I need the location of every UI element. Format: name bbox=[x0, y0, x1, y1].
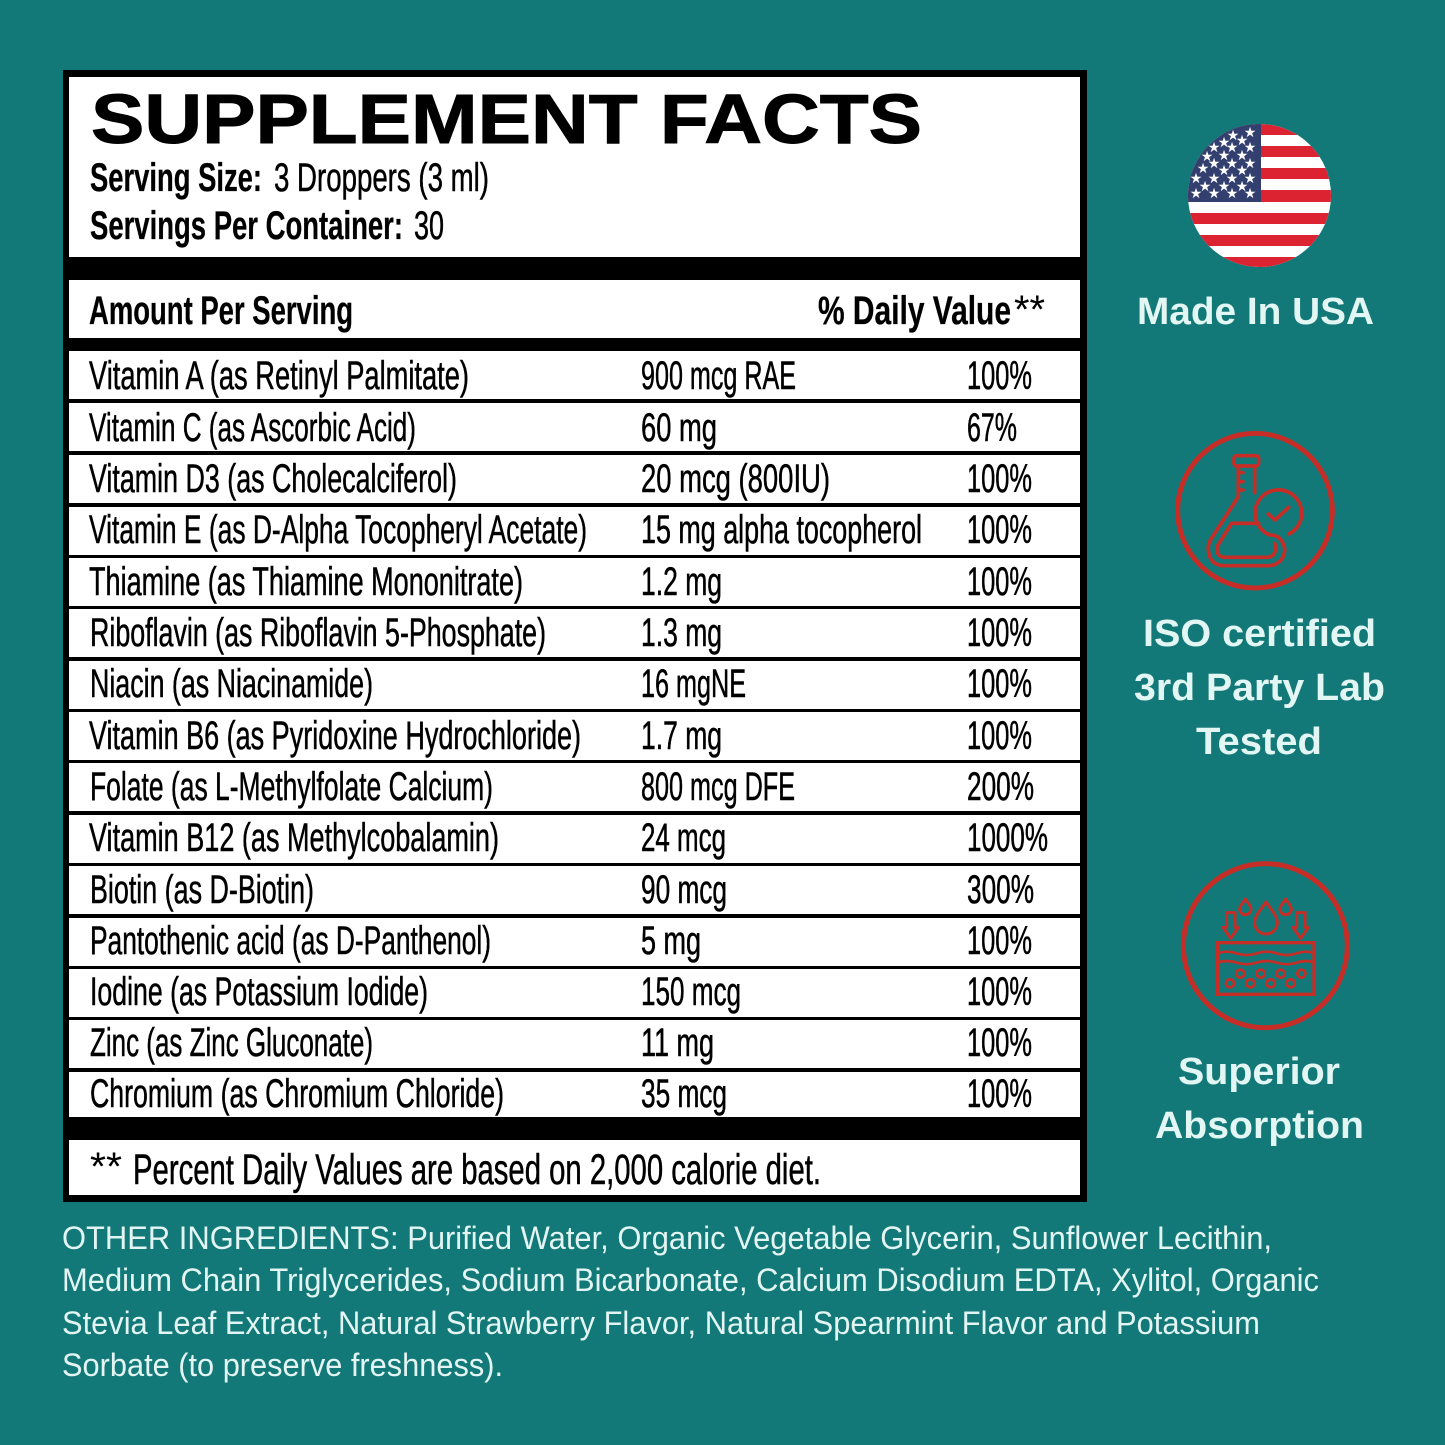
row: iodine: 100% bbox=[967, 970, 1032, 1014]
row: riboflavin: 1.3 mg bbox=[641, 611, 722, 655]
row: vitamin D3: 100% bbox=[967, 457, 1032, 501]
row: folate bbox=[69, 763, 1080, 811]
badge label: superior absorption bbox=[1155, 1051, 1364, 1147]
text block: other ingredients bbox=[62, 1220, 1319, 1383]
row: vitamin C: 67% bbox=[967, 406, 1017, 450]
icon: US flag: ★ bbox=[1236, 162, 1248, 178]
icon: US flag: ★ bbox=[1226, 170, 1238, 186]
text block: other ingredients: Medium Chain Triglycerides, Sodium Bicarbonate, Calcium Disodium EDTA, Xylitol, Organic bbox=[62, 1262, 1319, 1298]
row: vitamin B6: Vitamin B6 (as Pyridoxine Hydrochloride) bbox=[89, 714, 581, 758]
row: zinc: Zinc (as Zinc Gluconate) bbox=[90, 1021, 373, 1065]
row: vitamin B12: 1000% bbox=[967, 816, 1048, 860]
row: vitamin D3: 20 mcg (800IU) bbox=[641, 457, 830, 501]
row: vitamin A: 100% bbox=[967, 354, 1032, 398]
icon: US flag: ★ bbox=[1227, 127, 1239, 143]
row: biotin bbox=[69, 866, 1080, 914]
badge label: made in USA: Made In USA bbox=[1137, 291, 1374, 333]
servings per container: Servings Per Container: bbox=[90, 204, 403, 248]
row: biotin: 300% bbox=[967, 868, 1034, 912]
icon: US flag: ★ bbox=[1244, 185, 1256, 201]
panel: column headings: ** bbox=[1014, 288, 1045, 332]
row: riboflavin: Riboflavin (as Riboflavin 5-Phosphate) bbox=[90, 611, 546, 655]
icon: US flag: ★ bbox=[1226, 185, 1238, 201]
row: vitamin C bbox=[69, 403, 1080, 451]
icon: US flag: ★ bbox=[1208, 185, 1220, 201]
icon: US flag: ★ bbox=[1236, 147, 1248, 163]
row: pantothenic acid: Pantothenic acid (as D-Panthenol) bbox=[90, 919, 491, 963]
panel: label header bbox=[69, 77, 1080, 257]
icon: US flag: ★ bbox=[1190, 185, 1202, 201]
row: vitamin A bbox=[69, 351, 1080, 399]
row: pantothenic acid: 5 mg bbox=[641, 919, 701, 963]
row: folate: 800 mcg DFE bbox=[641, 765, 795, 809]
icon: US flag bbox=[1188, 124, 1332, 268]
icon: US flag: ★ bbox=[1218, 147, 1230, 163]
row: chromium: 35 mcg bbox=[641, 1072, 727, 1116]
row: zinc bbox=[69, 1020, 1080, 1068]
icon: US flag: ★ bbox=[1236, 132, 1248, 148]
row: niacin bbox=[69, 661, 1080, 709]
icon: US flag: ★ bbox=[1199, 178, 1211, 194]
text block: other ingredients: OTHER INGREDIENTS: Purified Water, Organic Vegetable Glycerin, Sunflower Lecithin, bbox=[62, 1220, 1272, 1256]
text block: other ingredients: Sorbate (to preserve freshness). bbox=[62, 1347, 503, 1383]
icon: US flag: ★ bbox=[1226, 139, 1238, 155]
icon: US flag: ★ bbox=[1208, 170, 1220, 186]
text block: other ingredients: Stevia Leaf Extract, Natural Strawberry Flavor, Natural Spearmint Flavor and Potassium bbox=[62, 1305, 1260, 1341]
row: vitamin D3: Vitamin D3 (as Cholecalciferol) bbox=[89, 457, 457, 501]
badge label: ISO certified: Tested bbox=[1196, 721, 1322, 763]
row: vitamin B12 bbox=[69, 815, 1080, 863]
icon: US flag: ★ bbox=[1226, 155, 1238, 171]
row: iodine: 150 mcg bbox=[641, 970, 741, 1014]
icon: US flag: ★ bbox=[1236, 178, 1248, 194]
panel: supplement facts label bbox=[63, 70, 1087, 1202]
row: vitamin E: Vitamin E (as D-Alpha Tocopheryl Acetate) bbox=[89, 508, 587, 552]
icon: US flag: ★ bbox=[1190, 170, 1202, 186]
icon: US flag: ★ bbox=[1197, 160, 1209, 176]
row: riboflavin bbox=[69, 609, 1080, 657]
footnote: Percent Daily Values are based on 2,000 calorie diet. bbox=[133, 1146, 821, 1194]
badge label: superior absorption: Superior bbox=[1178, 1051, 1340, 1093]
row: chromium: Chromium (as Chromium Chloride) bbox=[90, 1072, 504, 1116]
icon: US flag: ★ bbox=[1201, 148, 1213, 164]
row: vitamin B6: 100% bbox=[967, 714, 1032, 758]
badge label: superior absorption: Absorption bbox=[1155, 1105, 1364, 1147]
row: vitamin A: Vitamin A (as Retinyl Palmitate) bbox=[89, 354, 469, 398]
row: thiamine: 1.2 mg bbox=[641, 560, 722, 604]
row: zinc: 11 mg bbox=[641, 1021, 714, 1065]
icon: US flag: ★ bbox=[1244, 139, 1256, 155]
icon: skin absorption bbox=[1183, 864, 1347, 1028]
icon: US flag: ★ bbox=[1218, 134, 1230, 150]
panel: column headings: Amount Per Serving bbox=[89, 289, 353, 333]
row: vitamin A: 900 mcg RAE bbox=[641, 354, 796, 398]
row: pantothenic acid bbox=[69, 918, 1080, 966]
row: biotin: 90 mcg bbox=[641, 868, 727, 912]
row: vitamin B12: Vitamin B12 (as Methylcobalamin) bbox=[89, 816, 499, 860]
row: vitamin B6 bbox=[69, 712, 1080, 760]
row: vitamin E: 15 mg alpha tocopherol bbox=[641, 508, 922, 552]
row: vitamin B6: 1.7 mg bbox=[641, 714, 722, 758]
row: chromium bbox=[69, 1072, 1080, 1117]
row: zinc: 100% bbox=[967, 1021, 1032, 1065]
row: chromium: 100% bbox=[967, 1072, 1032, 1116]
row: riboflavin: 100% bbox=[967, 611, 1032, 655]
row: pantothenic acid: 100% bbox=[967, 919, 1032, 963]
row: thiamine bbox=[69, 558, 1080, 606]
icon: US flag: ★ bbox=[1244, 170, 1256, 186]
row: vitamin C: 60 mg bbox=[641, 406, 717, 450]
row: vitamin C: Vitamin C (as Ascorbic Acid) bbox=[89, 406, 416, 450]
badge label: ISO certified: ISO certified bbox=[1143, 613, 1376, 655]
serving size: Serving Size: bbox=[90, 156, 262, 200]
icon: US flag: ★ bbox=[1244, 155, 1256, 171]
row: niacin: 100% bbox=[967, 662, 1032, 706]
icon: US flag: ★ bbox=[1208, 155, 1220, 171]
row: folate: Folate (as L-Methylfolate Calcium) bbox=[90, 765, 493, 809]
badge label: ISO certified: 3rd Party Lab bbox=[1134, 667, 1385, 709]
row: vitamin D3 bbox=[69, 455, 1080, 503]
row: vitamin E bbox=[69, 507, 1080, 555]
row: folate: 200% bbox=[967, 765, 1034, 809]
icon: US flag: ★ bbox=[1208, 139, 1220, 155]
row: iodine: Iodine (as Potassium Iodide) bbox=[90, 970, 428, 1014]
row: vitamin B12: 24 mcg bbox=[641, 816, 726, 860]
icon: lab flask with check bbox=[1178, 433, 1332, 588]
serving size: 3 Droppers (3 ml) bbox=[274, 156, 489, 200]
icon: US flag: ★ bbox=[1218, 162, 1230, 178]
row: niacin: Niacin (as Niacinamide) bbox=[90, 662, 373, 706]
badge label: ISO certified bbox=[1134, 613, 1385, 763]
row: niacin: 16 mgNE bbox=[641, 662, 746, 706]
row: thiamine: 100% bbox=[967, 560, 1032, 604]
icon: US flag: ★ bbox=[1244, 124, 1256, 140]
footnote: ** bbox=[90, 1145, 122, 1189]
row: thiamine: Thiamine (as Thiamine Mononitrate) bbox=[89, 560, 523, 604]
serving size bbox=[90, 156, 489, 200]
title: SUPPLEMENT FACTS bbox=[91, 80, 922, 158]
servings per container: 30 bbox=[414, 204, 444, 248]
row: biotin: Biotin (as D-Biotin) bbox=[90, 868, 314, 912]
icon: US flag: ★ bbox=[1218, 178, 1230, 194]
row: vitamin E: 100% bbox=[967, 508, 1032, 552]
panel: column headings bbox=[69, 280, 1080, 338]
panel: column headings: % Daily Value bbox=[818, 289, 1011, 333]
row: iodine bbox=[69, 969, 1080, 1017]
